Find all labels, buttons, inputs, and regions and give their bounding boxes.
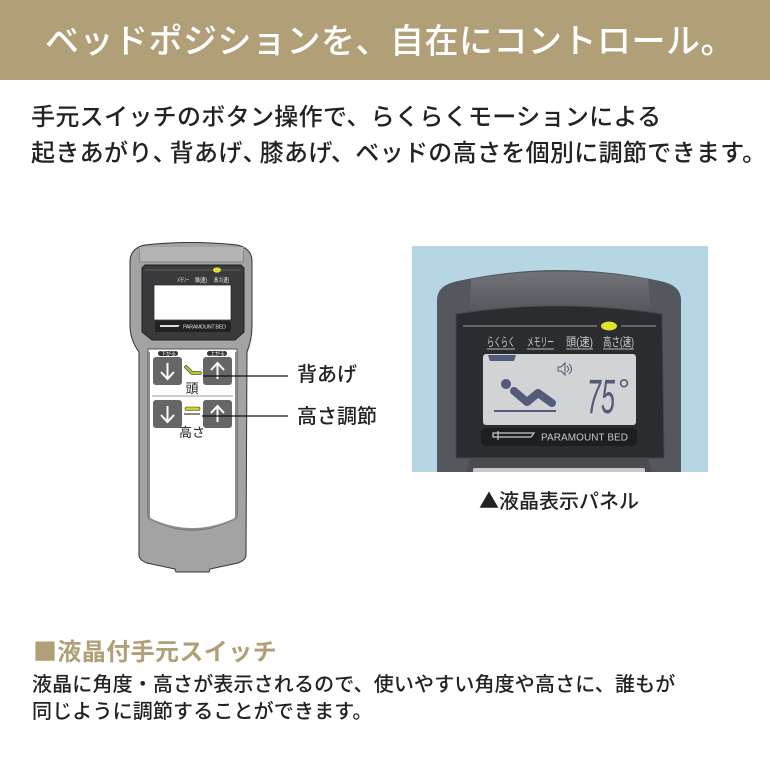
panel labels: 高さ(速)	[214, 276, 229, 284]
remote body	[130, 242, 252, 572]
angle readout: 75	[587, 371, 615, 424]
key labels	[487, 335, 634, 349]
button text: 頭	[185, 381, 199, 396]
angle readout	[590, 379, 628, 414]
small button captions: 上がる	[210, 350, 225, 358]
photo: LCD panel closeup	[412, 246, 708, 480]
LCD screen	[483, 354, 636, 425]
panel labels: 頭(速)	[195, 277, 207, 284]
lower housing	[466, 458, 652, 472]
header band	[0, 0, 770, 80]
key labels: らくらく	[487, 335, 515, 349]
lamp and rule	[463, 325, 597, 327]
remote control illustration: 高さ	[179, 425, 205, 440]
bed posture icon	[501, 379, 511, 389]
key labels: 頭(速)	[566, 335, 593, 349]
photo caption: ▲液晶表示パネル	[479, 485, 639, 514]
brand	[155, 321, 231, 332]
small button captions: 下がる	[161, 350, 176, 358]
device body	[437, 270, 681, 480]
remote control illustration	[130, 242, 708, 572]
label: back raise: 背あげ	[297, 364, 357, 386]
intro text: 起きあがり、背あげ、膝あげ、ベッドの高さを個別に調節できます。	[31, 140, 767, 166]
intro text	[31, 104, 767, 166]
title: ベッドポジションを、自在にコントロール。	[45, 23, 735, 61]
buttons	[153, 357, 232, 428]
white button panel	[148, 349, 237, 530]
key labels: メモリー	[527, 335, 554, 349]
description text: 液晶に角度・高さが表示されるので、使いやすい角度や高さに、誰もが	[32, 674, 675, 696]
bed position icons	[184, 367, 200, 415]
label: height adjust: 高さ調節	[297, 406, 377, 428]
angle readout: °	[618, 374, 630, 407]
leader lines	[202, 376, 288, 416]
intro text: 手元スイッチのボタン操作で、らくらくモーションによる	[31, 104, 661, 131]
description text	[32, 674, 675, 723]
panel labels: メモリー	[177, 277, 189, 284]
dark display panel	[142, 265, 244, 340]
photo: LCD panel closeup: PARAMOUNT BED	[541, 432, 628, 444]
dark face panel	[456, 306, 664, 458]
section heading: ■液晶付手元スイッチ	[33, 632, 277, 667]
panel labels	[177, 276, 229, 284]
LCD	[154, 285, 231, 320]
speaker icon	[558, 363, 572, 375]
small button captions	[158, 350, 227, 358]
brand strip	[481, 428, 637, 446]
description text: 同じように調節することができます。	[32, 701, 373, 723]
remote control illustration: PARAMOUNT BED	[183, 324, 226, 330]
key labels: 高さ(速)	[603, 335, 634, 349]
indicator lamp	[213, 267, 221, 273]
